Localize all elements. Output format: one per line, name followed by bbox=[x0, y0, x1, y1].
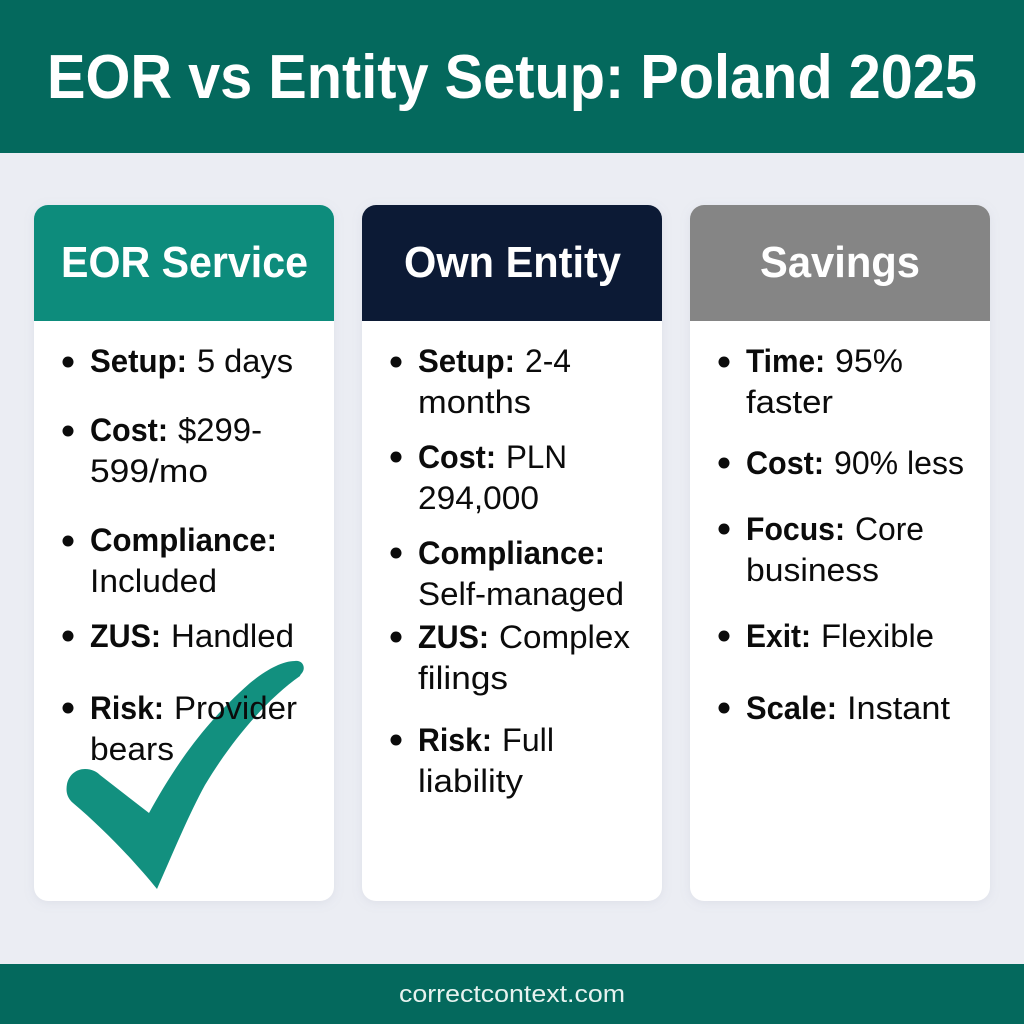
list: EOR Service items: Handled bbox=[171, 618, 294, 654]
list: Savings items: Time: bbox=[746, 343, 825, 379]
list: Savings items: Focus: bbox=[746, 511, 845, 547]
list: EOR Service items: Provider bbox=[174, 690, 297, 726]
footer text: correctcontext.com bbox=[399, 981, 625, 1008]
list: EOR Service items: 5 days bbox=[197, 343, 293, 379]
list: Own Entity items bbox=[390, 343, 630, 799]
list: EOR Service items: $299- bbox=[178, 412, 262, 448]
panel heading: Savings bbox=[690, 205, 990, 321]
panel heading: EOR Service bbox=[34, 205, 334, 321]
list: EOR Service items: bears bbox=[90, 731, 174, 767]
list: Own Entity items: liability bbox=[418, 763, 523, 799]
list: Own Entity items: PLN bbox=[506, 439, 567, 475]
title: EOR vs Entity Setup: Poland 2025 bbox=[47, 43, 977, 112]
list: Savings items bbox=[718, 343, 964, 726]
panel: EOR Service bbox=[34, 205, 334, 901]
list: Own Entity items: Self-managed bbox=[418, 576, 624, 612]
list: EOR Service items: Cost: bbox=[90, 412, 168, 448]
list: Savings items: Instant bbox=[847, 690, 950, 726]
list: Own Entity items: 2-4 bbox=[525, 343, 571, 379]
list: Own Entity items: Compliance: bbox=[418, 535, 605, 571]
panel: Savings bbox=[690, 205, 990, 901]
list: Savings items: faster bbox=[746, 384, 833, 420]
panel heading: EOR Service: EOR Service bbox=[61, 238, 308, 287]
list: Savings items: 95% bbox=[835, 343, 903, 379]
list: Own Entity items: Risk: bbox=[418, 722, 492, 758]
list: Own Entity items: months bbox=[418, 384, 531, 420]
list: Savings items: Exit: bbox=[746, 618, 811, 654]
footer band bbox=[0, 964, 1024, 1024]
list: EOR Service items: 599/mo bbox=[90, 453, 208, 489]
list: Own Entity items: Complex bbox=[499, 619, 630, 655]
icon: check mark bbox=[67, 661, 304, 889]
list: EOR Service items: Setup: bbox=[90, 343, 187, 379]
list: Savings items: Cost: bbox=[746, 445, 824, 481]
list: Savings items: Core bbox=[855, 511, 924, 547]
panel heading: Savings: Savings bbox=[760, 238, 920, 287]
list: Savings items: Flexible bbox=[821, 618, 934, 654]
panel: Own Entity bbox=[362, 205, 662, 901]
list: EOR Service items: ZUS: bbox=[90, 618, 161, 654]
list: Own Entity items: 294,000 bbox=[418, 480, 539, 516]
list: Savings items: Scale: bbox=[746, 690, 837, 726]
list: Own Entity items: Cost: bbox=[418, 439, 496, 475]
list: Own Entity items: Full bbox=[502, 722, 554, 758]
list: Own Entity items: Setup: bbox=[418, 343, 515, 379]
panel heading: Own Entity bbox=[362, 205, 662, 321]
list: Own Entity items: filings bbox=[418, 660, 508, 696]
list: EOR Service items: Compliance: bbox=[90, 522, 277, 558]
panel heading: Own Entity: Own Entity bbox=[404, 238, 621, 287]
list: EOR Service items bbox=[62, 343, 297, 767]
list: Own Entity items: ZUS: bbox=[418, 619, 489, 655]
list: EOR Service items: Included bbox=[90, 563, 217, 599]
list: Savings items: business bbox=[746, 552, 879, 588]
list: EOR Service items: Risk: bbox=[90, 690, 164, 726]
header banner bbox=[0, 0, 1024, 153]
list: Savings items: 90% less bbox=[834, 445, 964, 481]
